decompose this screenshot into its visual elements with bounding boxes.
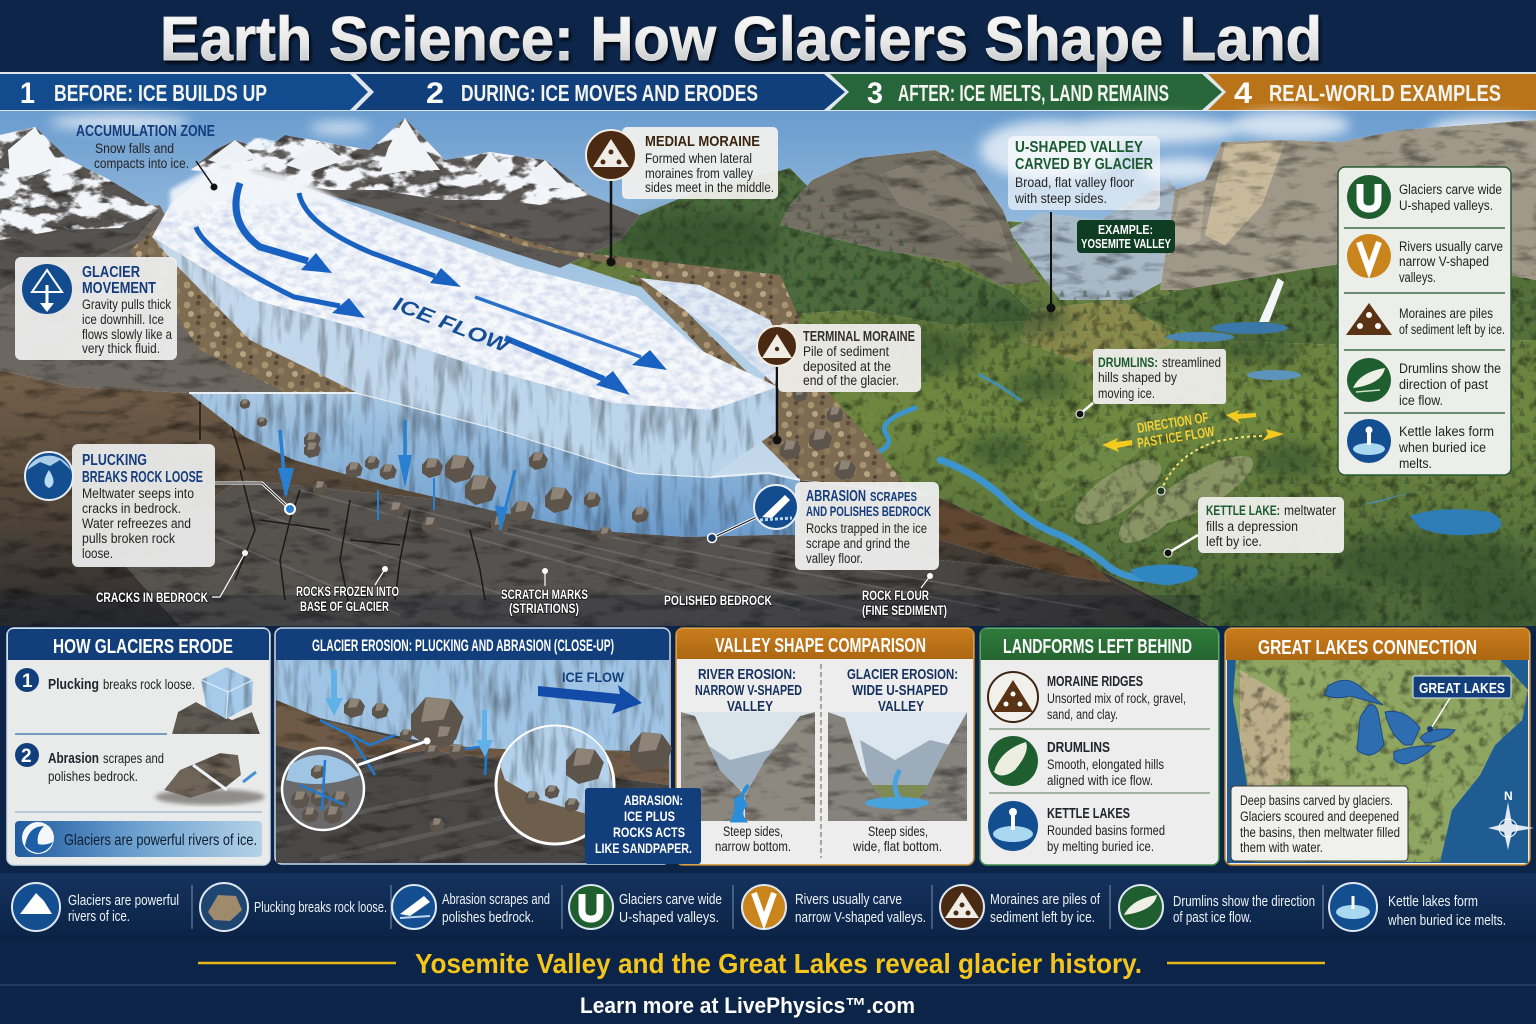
upper river (850, 375, 1020, 480)
compass (1488, 789, 1534, 850)
second ice lobe (640, 278, 782, 385)
strip item 1 (12, 883, 179, 931)
label: scratch marks (501, 568, 588, 616)
callout: drumlins: DRUMLINS: (1098, 354, 1158, 370)
badge: abrasion sandpaper: LIKE SANDPAPER. (595, 840, 692, 856)
ice flow arrow: ICE FLOW (562, 669, 625, 685)
callout: plucking (25, 444, 295, 567)
label: polished bedrock: POLISHED BEDROCK (664, 593, 772, 608)
panel: right summary list: of sediment left by ice. (1399, 322, 1505, 337)
ice cross-section (189, 393, 800, 537)
callout: u-shaped valley: CARVED BY GLACIER (1015, 156, 1153, 173)
callout: kettle lake: fills a depression (1206, 519, 1298, 534)
panel: how glaciers erode: HOW GLACIERS ERODE (53, 636, 233, 658)
example badge: yosemite: EXAMPLE: (1098, 222, 1153, 237)
map (1227, 660, 1534, 863)
map note: them with water. (1240, 840, 1323, 855)
close-up illustration (276, 660, 672, 863)
callout: medial moraine (586, 127, 778, 266)
icon: V valley (1347, 234, 1391, 278)
callout: medial moraine: Formed when lateral (645, 151, 752, 166)
right valley land (560, 210, 1536, 626)
label: rocks frozen: BASE OF GLACIER (300, 599, 389, 614)
forest slope right (1120, 255, 1536, 345)
kettle lake (1130, 564, 1198, 585)
left cliff (780, 150, 1040, 285)
bedrock cracks (200, 400, 485, 610)
step 2 during: 2 (426, 77, 444, 110)
step 1 before (0, 74, 368, 110)
badge: abrasion sandpaper: ROCKS ACTS (613, 824, 685, 840)
icon: abrading rock (155, 753, 265, 805)
bottom summary strip (0, 873, 1536, 941)
tree clusters (620, 175, 1536, 630)
right cliffs (1160, 120, 1536, 320)
lower river (940, 460, 1150, 578)
strip item 8: when buried ice melts. (1387, 912, 1506, 929)
callout: medial moraine: MEDIAL MORAINE (645, 133, 760, 150)
mountains behind glacier (0, 118, 640, 290)
strip item 1: rivers of ice. (68, 908, 130, 925)
floor striations (200, 490, 1100, 620)
step 2 abrasion: Abrasion (48, 750, 99, 767)
item: moraine ridges: sand, and clay. (1047, 707, 1118, 722)
strip item 3: Abrasion scrapes and (442, 891, 550, 908)
item: kettle lakes: by melting buried ice. (1047, 839, 1154, 854)
icon: moraine (586, 130, 636, 180)
label: accumulation zone: ACCUMULATION ZONE (76, 123, 215, 140)
panel: right summary list: when buried ice (1398, 440, 1486, 455)
item: kettle lakes: KETTLE LAKES (1047, 805, 1130, 822)
item: drumlins: aligned with ice flow. (1047, 773, 1153, 788)
panel: right summary list: valleys. (1399, 270, 1436, 285)
strip item 4: U-shaped valleys. (619, 909, 719, 926)
label: scratch marks: (STRIATIONS) (509, 601, 579, 616)
forest slope left (560, 168, 1040, 325)
panel: great lakes connection (1225, 628, 1534, 865)
callout: u-shaped valley: U-SHAPED VALLEY (1015, 139, 1144, 156)
footer link text: Learn more at LivePhysics™.com (580, 993, 915, 1018)
badge: abrasion sandpaper (585, 788, 701, 864)
label: rock flour: (FINE SEDIMENT) (862, 603, 947, 618)
column: river erosion: VALLEY (727, 698, 773, 715)
label: accumulation zone (76, 123, 218, 190)
item: kettle lakes (988, 801, 1165, 854)
callout: drumlins: hills shaped by (1098, 370, 1177, 385)
item: moraine ridges (988, 672, 1186, 722)
waterfall and upper lakes (1166, 278, 1301, 380)
riverbank cut (935, 497, 1110, 582)
callout: kettle lake: meltwater (1284, 503, 1336, 518)
strip item 5: narrow V-shaped valleys. (795, 909, 926, 926)
callout: plucking: pulls broken rock (82, 531, 175, 546)
step 3 after: AFTER: ICE MELTS, LAND REMAINS (898, 80, 1169, 106)
icon: ice block on rocks (172, 667, 260, 734)
callout: terminal moraine: end of the glacier. (803, 373, 899, 388)
step 2 abrasion: polishes bedrock. (48, 768, 138, 784)
callout: u-shaped valley: Broad, flat valley floor (1015, 175, 1134, 190)
label: accumulation zone: compacts into ice. (94, 156, 189, 171)
drumlin hills (1027, 405, 1261, 552)
label: rock flour: ROCK FLOUR (862, 588, 929, 603)
label: rocks frozen: ROCKS FROZEN INTO (296, 584, 399, 599)
label: direction of past ice flow (1102, 409, 1284, 495)
icon: terminal moraine (757, 326, 797, 366)
callout: plucking: PLUCKING (82, 452, 147, 469)
bedrock cross-section (0, 370, 1210, 626)
panel: right summary list: direction of past (1399, 377, 1488, 392)
step 1 plucking: 1 (22, 671, 33, 692)
strip item 2: Plucking breaks rock loose. (254, 899, 387, 916)
step 2 abrasion: 2 (21, 746, 32, 767)
example badge: yosemite: YOSEMITE VALLEY (1081, 236, 1171, 251)
callout: kettle lake: left by ice. (1206, 534, 1262, 549)
callout: powerful rivers (15, 821, 262, 857)
lakes (1325, 680, 1455, 764)
step 3 after: 3 (867, 77, 883, 110)
step 2 abrasion: scrapes and (103, 750, 164, 766)
step 4 examples (1208, 74, 1536, 110)
step 2 during (356, 74, 845, 110)
magnifier left (282, 748, 364, 830)
step 1 plucking: breaks rock loose. (103, 676, 195, 692)
left slopes under mountains (0, 205, 350, 395)
callout: glacier movement: flows slowly like a (82, 327, 172, 342)
panel: close-up erosion: GLACIER EROSION: PLUCKING AND ABRASION (CLOSE-UP) (312, 637, 614, 655)
meltwater arrows (278, 420, 515, 530)
callout: kettle lake (1164, 497, 1344, 557)
column: river erosion: narrow bottom. (715, 838, 791, 854)
panel: landforms left behind: LANDFORMS LEFT BEHIND (1003, 636, 1192, 658)
panel: great lakes connection: GREAT LAKES CONNECTION (1258, 637, 1477, 659)
panel: right summary list: U-shaped valleys. (1399, 198, 1493, 213)
snowfield head of glacier (170, 160, 340, 215)
icon: water drop (25, 452, 73, 500)
callout: abrasion: valley floor. (806, 551, 863, 566)
kettle lakes right (1360, 490, 1501, 535)
strip item 8: Kettle lakes form (1388, 893, 1478, 910)
item: drumlins: Smooth, elongated hills (1047, 757, 1164, 772)
item: moraine ridges: Unsorted mix of rock, gravel, (1047, 691, 1186, 706)
rocks frozen in ice (240, 399, 649, 541)
icon: kettle (1347, 419, 1391, 463)
step 2 abrasion (15, 743, 164, 784)
callout: plucking: Meltwater seeps into (82, 486, 194, 501)
column: river erosion: NARROW V-SHAPED (695, 682, 802, 699)
step 1 plucking (15, 668, 195, 693)
takeaway banner: Yosemite Valley and the Great Lakes reveal glacier history. (415, 948, 1142, 979)
distant valley haze (1008, 180, 1220, 300)
panel: valley shape comparison: VALLEY SHAPE COMPARISON (715, 635, 926, 657)
label: rock flour (862, 573, 947, 618)
badge: abrasion sandpaper: ABRASION: (624, 792, 683, 808)
column: glacier erosion (828, 666, 967, 854)
main landscape scene (0, 111, 1536, 630)
strip item 6: Moraines are piles of (990, 891, 1101, 908)
callout: glacier movement: very thick fluid. (82, 341, 160, 356)
column: glacier erosion: GLACIER EROSION: (847, 666, 958, 683)
panel: right summary list: Rivers usually carve (1399, 239, 1503, 254)
icon: movement (22, 264, 72, 314)
step 1 before: 1 (20, 77, 35, 110)
callout: medial moraine: moraines from valley (645, 166, 753, 181)
step 4 examples: 4 (1234, 77, 1252, 110)
rocks on moraine toe (780, 388, 856, 480)
item: drumlins (988, 736, 1164, 788)
strip item 3 (392, 885, 550, 929)
callout: glacier movement: ice downhill. Ice (82, 312, 164, 327)
magnifier right (496, 726, 614, 844)
strip item 6 (940, 885, 1101, 929)
example badge: yosemite (1077, 220, 1175, 253)
icon: drumlin (1347, 358, 1391, 402)
callout: terminal moraine: TERMINAL MORAINE (803, 328, 915, 345)
column: glacier erosion: WIDE U-SHAPED (852, 682, 948, 699)
strip item 2 (200, 883, 387, 931)
callout: plucking: BREAKS ROCK LOOSE (82, 469, 203, 486)
step 3 after (830, 74, 1222, 110)
panel: right summary list: Kettle lakes form (1399, 424, 1494, 439)
strip item 7: Drumlins show the direction (1173, 893, 1315, 910)
map note: Glaciers scoured and deepened (1240, 809, 1399, 824)
column: glacier erosion: wide, flat bottom. (852, 838, 942, 854)
ice flow arrow (538, 669, 642, 714)
callout: abrasion (708, 482, 939, 570)
callout: glacier movement (15, 257, 177, 360)
strip item 5: Rivers usually carve (795, 891, 902, 908)
glacier ice wall (152, 237, 778, 477)
panel: how glaciers erode (7, 628, 270, 865)
callout: plucking: cracks in bedrock. (82, 501, 181, 516)
callout: plucking: loose. (82, 546, 113, 561)
icon: abrasion (754, 485, 798, 529)
badge: abrasion sandpaper: ICE PLUS (624, 808, 675, 824)
panel: right summary list: melts. (1399, 456, 1432, 471)
column: glacier erosion: VALLEY (878, 698, 924, 715)
column: river erosion: RIVER EROSION: (698, 666, 796, 683)
moraines (130, 210, 910, 490)
callout: abrasion: SCRAPES (870, 489, 917, 504)
callout: drumlins: moving ice. (1098, 386, 1155, 401)
label: direction of past ice flow: DIRECTION OF (1136, 409, 1210, 436)
strip item 3: polishes bedrock. (442, 909, 534, 926)
title: Earth Science: How Glaciers Shape Land (160, 5, 1322, 74)
callout: medial moraine: sides meet in the middle. (645, 180, 774, 195)
column: river erosion (681, 666, 815, 854)
strip item 4 (569, 885, 722, 929)
map note: the basins, then meltwater filled (1240, 825, 1400, 840)
item: kettle lakes: Rounded basins formed (1047, 823, 1165, 838)
callout: terminal moraine: Pile of sediment (803, 344, 889, 359)
callout: plucking: Water refreezes and (82, 516, 191, 531)
label: cracks in bedrock (96, 550, 248, 605)
step banner (0, 72, 1536, 111)
label: cracks in bedrock: CRACKS IN BEDROCK (96, 590, 208, 605)
item: moraine ridges: MORAINE RIDGES (1047, 673, 1143, 690)
callout: abrasion: scrape and grind the (806, 536, 910, 551)
callout: u-shaped valley (1008, 136, 1160, 312)
callout: glacier movement: GLACIER (82, 264, 140, 281)
callout: terminal moraine: deposited at the (803, 359, 891, 374)
panel: right summary list: Glaciers carve wide (1399, 182, 1502, 197)
step 2 during: DURING: ICE MOVES AND ERODES (461, 80, 758, 106)
dark vignette (0, 595, 1200, 626)
glacier surface (152, 167, 778, 410)
label: rocks frozen (296, 566, 399, 614)
callout: powerful rivers: Glaciers are powerful rivers of ice. (64, 832, 257, 849)
label: scratch marks: SCRATCH MARKS (501, 587, 588, 602)
strip item 5 (742, 885, 926, 929)
ice flow arrows (196, 183, 667, 395)
panel: valley shape comparison (676, 628, 974, 865)
callout: terminal moraine (757, 324, 921, 444)
label great lakes (1413, 676, 1511, 732)
step 1 before: BEFORE: ICE BUILDS UP (54, 80, 267, 106)
strip item 6: sediment left by ice. (990, 909, 1095, 926)
strip item 7 (1119, 885, 1315, 929)
strip item 8 (1329, 883, 1506, 931)
callout: glacier movement: Gravity pulls thick (82, 297, 171, 312)
map note: Deep basins carved by glaciers. (1240, 793, 1393, 808)
column: glacier erosion: Steep sides, (868, 823, 928, 839)
label: accumulation zone: Snow falls and (95, 141, 174, 156)
step 1 plucking: Plucking (48, 676, 99, 693)
label great lakes: GREAT LAKES (1419, 680, 1505, 697)
panel: right summary list: Moraines are piles (1399, 306, 1493, 321)
callout: glacier movement: MOVEMENT (82, 280, 156, 297)
item: drumlins: DRUMLINS (1047, 739, 1110, 756)
callout: abrasion: ABRASION (806, 488, 866, 505)
label: direction of past ice flow: PAST ICE FLOW (1136, 423, 1216, 451)
icon: U valley (1347, 175, 1391, 219)
strip item 1: Glaciers are powerful (68, 892, 179, 909)
panel: right summary list: ice flow. (1399, 393, 1443, 408)
callout: u-shaped valley: with steep sides. (1014, 191, 1107, 206)
callout: abrasion: AND POLISHES BEDROCK (806, 503, 931, 519)
strip item 7: of past ice flow. (1173, 909, 1252, 926)
column: river erosion: Steep sides, (723, 823, 783, 839)
callout: abrasion: Rocks trapped in the ice (806, 521, 927, 536)
panel: landforms left behind (980, 628, 1219, 865)
callout: drumlins (1076, 349, 1226, 418)
compass: N (1504, 789, 1513, 803)
callout: kettle lake: KETTLE LAKE: (1206, 502, 1280, 518)
ice flow label: ICE FLOW (390, 293, 514, 358)
panel: right summary list (1338, 167, 1511, 475)
map note (1231, 786, 1408, 861)
strip item 4: Glaciers carve wide (619, 891, 722, 908)
icon: moraine pile (1346, 303, 1392, 335)
panel: right summary list: Drumlins show the (1399, 361, 1501, 376)
panel: right summary list: narrow V-shaped (1399, 254, 1489, 269)
callout: drumlins: streamlined (1162, 355, 1221, 370)
panel: close-up erosion (275, 628, 672, 864)
